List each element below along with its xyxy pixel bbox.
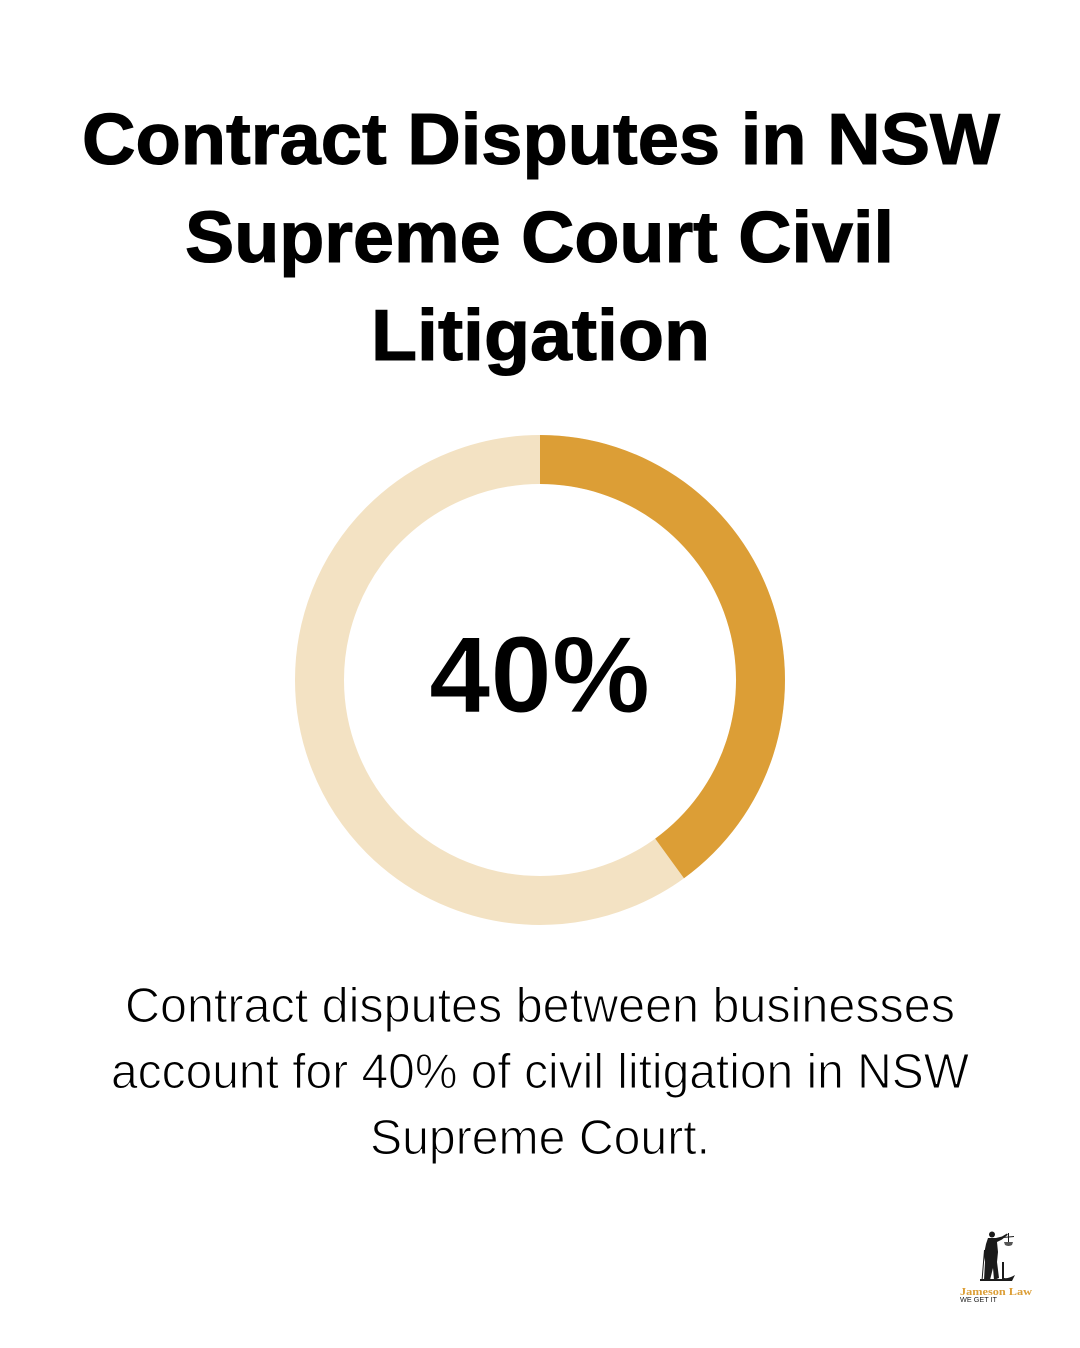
- description text: Contract disputes between businesses: [125, 979, 955, 1033]
- logo name: Jameson Law: [960, 1286, 1032, 1298]
- icon: lady justice: [980, 1232, 1015, 1281]
- title: Supreme Court Civil: [185, 198, 894, 278]
- description text: [111, 979, 970, 1165]
- donut track: remaining 60%: [320, 460, 760, 900]
- donut value: 40%: [429, 614, 650, 736]
- donut chart: 40%: [320, 435, 785, 900]
- description text: Supreme Court.: [370, 1111, 710, 1165]
- donut segment: 40%: [540, 435, 785, 878]
- logo: Jameson Law: [960, 1232, 1032, 1304]
- logo tagline: WE GET IT: [960, 1297, 998, 1304]
- title: Litigation: [371, 296, 710, 376]
- title: [82, 100, 1000, 376]
- title: Contract Disputes in NSW: [82, 100, 1000, 180]
- description text: account for 40% of civil litigation in NSW: [111, 1045, 970, 1099]
